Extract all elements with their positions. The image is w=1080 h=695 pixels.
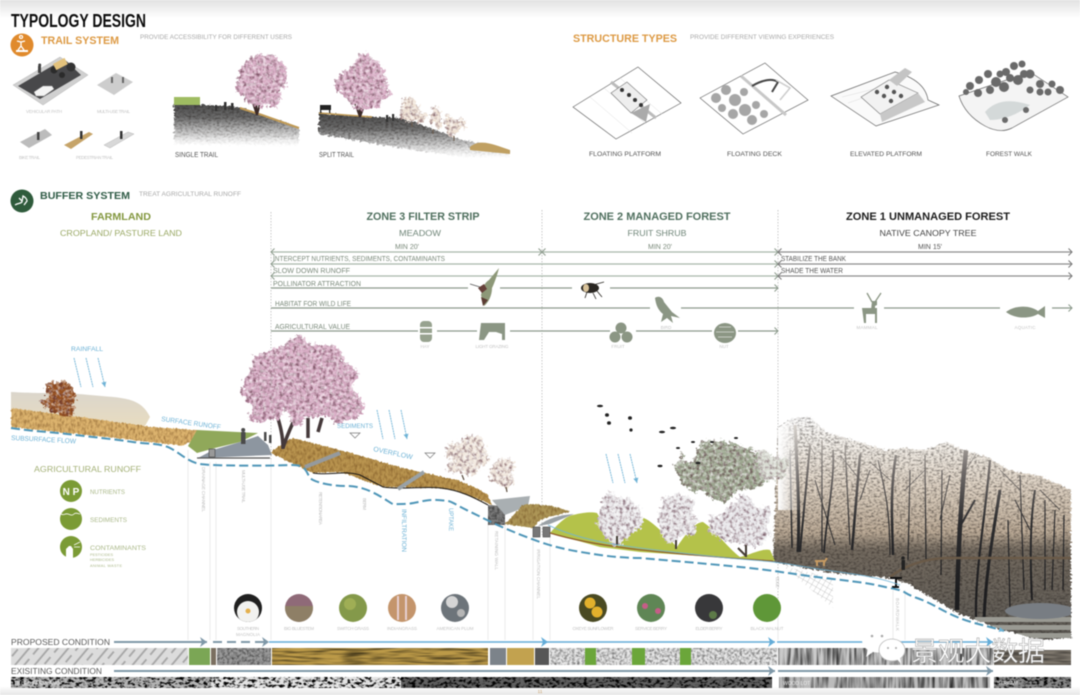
buffer function labels: STABILIZE THE BANK: [781, 254, 846, 263]
proposed condition row: [11, 638, 1071, 665]
buffer function arrows: [271, 252, 1072, 331]
boardwalk support: [890, 578, 902, 587]
watermark: wechat logo and text: 景观大数据: [911, 637, 1045, 667]
stabilize arrow: [778, 263, 1072, 265]
label: FOREST WALK: [986, 151, 1032, 158]
icon: bike trail: [20, 129, 52, 148]
hazy tree line: [11, 392, 150, 426]
column heading: zone 2: FRUIT SHRUB: [628, 228, 687, 238]
irrigation channel boxes: [533, 527, 550, 537]
icon labels: AQUATIC: [1014, 325, 1036, 330]
plant: southern magnolia: [234, 594, 262, 637]
icon: pedestrian trail: [64, 131, 93, 149]
label: SPLIT TRAIL: [319, 152, 354, 159]
contaminants: [60, 536, 147, 568]
column heading: farmland: FARMLAND: [91, 211, 151, 223]
heading: trail system: [10, 34, 293, 56]
buffer function labels: POLLINATOR ATTRACTION: [273, 279, 361, 288]
page number: 11: [538, 689, 543, 694]
wildlife icons and crop icons: [420, 268, 1045, 349]
heading: trail system: PROVIDE ACCESSIBILITY FOR DIFFERENT USERS: [140, 34, 293, 41]
intercept arrow: [271, 263, 778, 265]
width arrows: min 20, 20, 15: [271, 251, 1072, 253]
section: forest photo zone 1: [773, 415, 1075, 640]
small cream trees: [446, 440, 518, 487]
heading: buffer system: [10, 190, 241, 212]
vertical section labels: IRRIGATION CHANNEL: [536, 549, 541, 599]
column heading: zone 2: ZONE 2 MANAGED FOREST: [584, 211, 731, 223]
plant: southern magnolia: SOUTHERN: [237, 626, 259, 631]
diagram: elevated platform: [831, 68, 939, 158]
plant: american plum: AMERICAN PLUM: [436, 626, 474, 631]
contaminants: CONTAMINANTS: [90, 545, 147, 552]
agricultural value arrow: [271, 330, 778, 332]
diagram: forest walk: [959, 60, 1068, 158]
vertical section labels: DRAINAGE CHANNEL: [201, 467, 206, 512]
rainfall label and arrows: RAINFALL: [71, 346, 103, 353]
trail labels: VEHICULAR PATH: [26, 109, 62, 114]
contaminants: PESTICIDES: [90, 553, 113, 557]
existing condition row: [11, 667, 1071, 688]
buffer function labels: MIN 15': [918, 242, 943, 251]
plant: oxeye sunflower: [572, 594, 614, 631]
existing condition row: EXISITING CONDITION: [11, 667, 102, 676]
water level markers: [350, 433, 435, 458]
section: managed forest fruit shrubs: [550, 405, 791, 561]
green oak: [679, 441, 791, 499]
column heading: farmland: [60, 211, 182, 238]
proposed condition row: PROPOSED CONDITION: [11, 638, 110, 647]
plant: southern magnolia: MAGNOLIA: [236, 632, 260, 637]
vertical section labels: MULTI-USE TRAIL: [241, 470, 246, 503]
deer: [815, 558, 827, 566]
title: TYPOLOGY DESIGN: [11, 11, 146, 31]
section: farm field: [11, 381, 272, 458]
riparian grass: [505, 504, 570, 528]
legend: agricultural runoff: AGRICULTURAL RUNOFF: [34, 464, 141, 474]
icon: multi-use trail: [97, 73, 133, 95]
column heading: zone 3: MEADOW: [399, 228, 441, 238]
zone 2 rain arrows: [606, 454, 637, 483]
retaining wall: [488, 505, 505, 525]
sediments: SEDIMENTS: [90, 517, 128, 524]
label: SINGLE TRAIL: [175, 152, 218, 159]
tree: pink blossom: [237, 55, 287, 105]
section: thin vertical leader lines: [188, 450, 905, 640]
vertical section labels: RETENTION AREA: [318, 492, 323, 526]
legend: agricultural runoff: [34, 464, 147, 568]
buffer function labels: SLOW DOWN RUNOFF: [273, 266, 351, 275]
surface runoff label: SURFACE RUNOFF: [161, 416, 221, 431]
vertical section labels: RETAINING WALL: [494, 531, 499, 570]
plant: american plum: [436, 594, 474, 631]
icon labels: LIGHT GRAZING: [476, 344, 509, 349]
buffer function labels: [273, 242, 943, 331]
icon labels: BIRD: [661, 325, 672, 330]
plant: service berry: [635, 594, 667, 631]
heading: structure types: PROVIDE DIFFERENT VIEWING EXPERIENCES: [690, 34, 835, 41]
heading: structure types: [573, 33, 835, 45]
plant: switch grass: [337, 594, 369, 631]
shade arrow: [778, 275, 1072, 277]
vertical section labels: BOARDWALK: [895, 598, 900, 632]
icon: hummingbird: [470, 268, 499, 306]
plant: black walnut: BLACK WALNUT: [750, 626, 784, 631]
icon labels: FRUIT: [611, 344, 625, 349]
habitat arrow: [271, 307, 1072, 309]
infiltration label: INFILTRATION: [400, 509, 407, 552]
icon labels: [421, 325, 1036, 349]
condition arrows: [114, 641, 993, 643]
buffer function labels: AGRICULTURAL VALUE: [275, 322, 350, 331]
column heading: farmland: CROPLAND/ PASTURE LAND: [60, 228, 182, 238]
vertical section labels: EDGE: [775, 577, 780, 588]
label: ELEVATED PLATFORM: [850, 151, 922, 158]
icon: fish: [1006, 306, 1045, 318]
contaminants: ANIMAL WASTE: [90, 564, 122, 568]
trail labels: MULTI-USE TRAIL: [97, 109, 130, 114]
existing material strip: TILLED FARMLAND: [14, 681, 60, 687]
flock of birds: [597, 405, 738, 467]
icon: bee: [581, 282, 604, 299]
heading: buffer system: TREAT AGRICULTURAL RUNOFF: [139, 191, 241, 198]
icon labels: MAMMAL: [856, 325, 878, 330]
trail labels: BIKE TRAIL: [19, 155, 40, 160]
tree: pink blossom: [337, 59, 389, 109]
icon: nut: [714, 323, 736, 343]
buffer function labels: MIN 20': [395, 242, 420, 251]
trail labels: PEDESTRIAN TRAIL: [76, 155, 113, 160]
trail surface: [198, 436, 272, 458]
column heading: zone 1: ZONE 1 UNMANAGED FOREST: [846, 211, 1010, 223]
plant: switch grass: SWITCH GRASS: [337, 626, 369, 631]
plant: indiangrass: [387, 594, 417, 631]
icon labels: NUT: [719, 344, 729, 349]
icon: fruit: [610, 322, 632, 342]
existing material strip: WOOD LOT: [783, 681, 810, 687]
heading: structure types: STRUCTURE TYPES: [573, 33, 677, 45]
overflow label: OVERFLOW: [373, 446, 414, 461]
plant: big bluestem: [284, 594, 314, 631]
buffer function labels: HABITAT FOR WILD LIFE: [275, 299, 351, 308]
grass verge: [188, 430, 258, 453]
icon: cow: [479, 323, 505, 340]
label: FLOATING PLATFORM: [589, 151, 661, 158]
sediments label and arrows: SEDIMENTS: [337, 423, 373, 430]
slow down arrow: [271, 275, 778, 277]
trunks: [785, 425, 1064, 622]
buffer function labels: MIN 20': [648, 242, 673, 251]
icon: deer: [862, 293, 881, 323]
nutrients: N P: [63, 487, 80, 498]
white shrubs: [599, 497, 774, 547]
sediments label and arrows: [337, 410, 407, 439]
subsurface flow dashed line: [11, 428, 1004, 631]
section: single trail: [174, 55, 299, 159]
icon: vehicular path: [13, 57, 88, 105]
existing material strip: [11, 677, 1071, 688]
trail labels: [19, 109, 130, 160]
section: hatched bank: [783, 566, 833, 608]
plant: elder berry: [695, 594, 723, 631]
plant: elder berry: ELDER BERRY: [696, 626, 722, 631]
column heading: zone 1: NATIVE CANOPY TREE: [880, 228, 977, 238]
icon: hay: [420, 321, 432, 342]
rainfall label and arrows: [71, 346, 105, 387]
buffer function labels: SHADE THE WATER: [781, 266, 843, 275]
heading: trail system: TRAIL SYSTEM: [41, 35, 119, 47]
column heading: zone 3: [366, 211, 480, 238]
proposed material strip: [11, 648, 1071, 665]
plant: service berry: SERVICE BERRY: [635, 626, 667, 631]
pollinator arrow: [271, 287, 778, 289]
plant: big bluestem: BIG BLUESTEM: [284, 626, 314, 631]
crop field: [11, 408, 197, 446]
watermark: wechat logo and text: [862, 628, 1045, 667]
plant: black walnut: [750, 594, 784, 631]
heading: buffer system: BUFFER SYSTEM: [40, 190, 130, 202]
nutrients: NUTRIENTS: [90, 489, 126, 496]
buffer function labels: INTERCEPT NUTRIENTS, SEDIMENTS, CONTAMINANTS: [273, 254, 445, 263]
diagram: floating platform: [573, 67, 681, 158]
section: filter strip meadow: [270, 438, 574, 537]
nutrients: [60, 480, 126, 502]
column heading: zone 1: [846, 211, 1010, 238]
uptake label: UPTAKE: [447, 508, 454, 531]
subsurface flow label: SUBSURFACE FLOW: [11, 435, 77, 445]
autumn tree: [44, 381, 78, 417]
label: FLOATING DECK: [727, 151, 782, 158]
plant: oxeye sunflower: OXEYE SUNFLOWER: [572, 626, 614, 631]
diagram: floating deck: [700, 63, 808, 158]
section: large pink tree: [244, 340, 363, 449]
cow: [320, 105, 331, 113]
column heading: zone 3: ZONE 3 FILTER STRIP: [366, 211, 480, 223]
small cream trees: [403, 102, 463, 136]
icon: bird: [655, 297, 680, 323]
stepped rock bank: [975, 617, 1071, 638]
contaminants: HERBICIDES: [90, 558, 114, 562]
trail types: isometric path icons: [13, 57, 134, 160]
plant: indiangrass: INDIANGRASS: [387, 626, 417, 631]
icon labels: HAY: [421, 344, 429, 349]
icon: narrow trail: [104, 131, 134, 148]
section: split trail: [319, 59, 510, 159]
boardwalk: [890, 558, 1071, 577]
person on boardwalk: [901, 556, 905, 570]
yellow meadow: [550, 512, 775, 561]
existing material strip: STREAM: [997, 681, 1018, 687]
vertical section labels: [201, 467, 900, 632]
column heading: zone 2: [584, 211, 731, 238]
vertical section labels: BERM: [362, 498, 367, 510]
